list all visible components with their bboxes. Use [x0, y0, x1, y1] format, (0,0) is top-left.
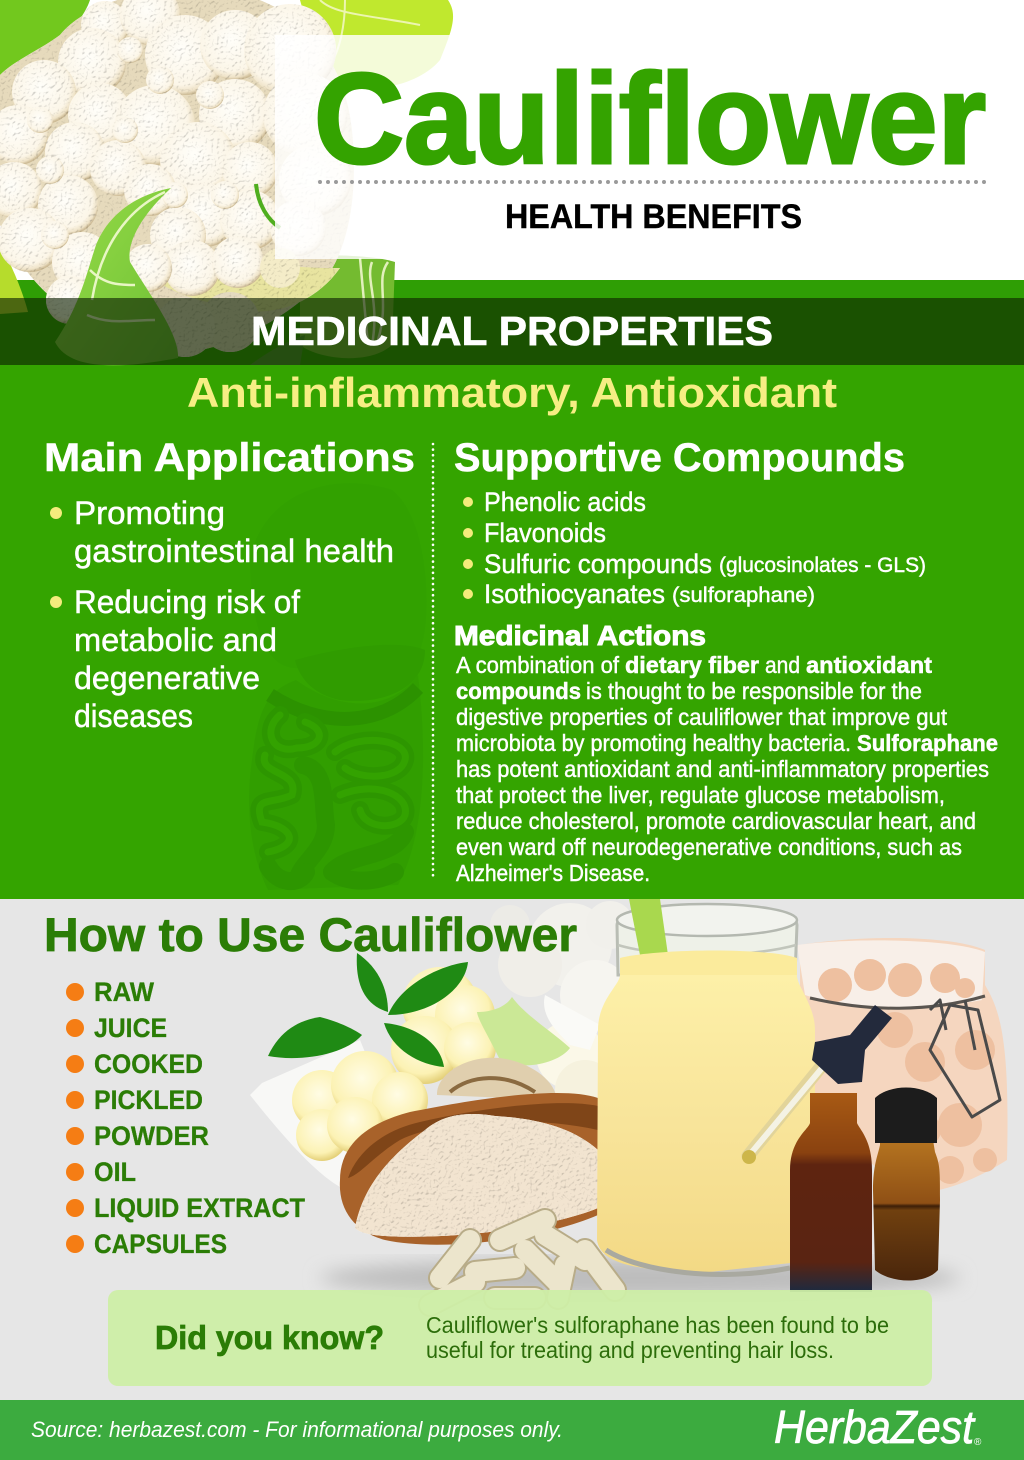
medicinal actions paragraph: compounds — [456, 678, 581, 704]
HerbaZest logo: HerbaZest — [774, 1401, 976, 1453]
medicinal actions paragraph: A combination of — [456, 652, 620, 678]
small stem — [256, 184, 280, 228]
list: forms of use: LIQUID EXTRACT — [94, 1193, 305, 1223]
roasted cauliflower slice — [437, 1058, 557, 1100]
curd florets — [0, 0, 354, 357]
application bullets: gastrointestinal health — [74, 533, 394, 569]
medicinal actions paragraph: microbiota by promoting healthy bacteria. — [456, 730, 851, 756]
small amber bottle — [873, 1088, 940, 1281]
title dotted rule — [320, 180, 986, 184]
list: forms of use: RAW — [94, 977, 154, 1007]
basil leaves — [268, 953, 468, 1067]
medicinal actions paragraph: is thought to be responsible for the — [586, 678, 922, 704]
green top band — [0, 280, 1024, 298]
heading: main applications: Main Applications — [44, 436, 415, 480]
list: forms of use: POWDER — [94, 1121, 209, 1151]
medicinal actions paragraph: antioxidant — [806, 652, 932, 678]
medicinal actions paragraph: Alzheimer's Disease. — [456, 860, 650, 886]
list: forms of use: PICKLED — [94, 1085, 203, 1115]
compound bullets — [463, 487, 926, 609]
translucent white title panel — [275, 35, 450, 259]
medicinal actions paragraph: digestive properties of cauliflower that improve gut — [456, 704, 948, 730]
medicinal actions paragraph: Sulforaphane — [857, 730, 998, 756]
medicinal actions paragraph: dietary fiber — [625, 652, 759, 678]
illustration: cauliflower preparations — [250, 899, 1008, 1305]
medicinal properties panel background — [0, 298, 1024, 899]
left bottom lime leaf — [0, 245, 28, 314]
application bullets: metabolic and — [74, 622, 277, 658]
application bullets: diseases — [74, 698, 193, 734]
heading: medicinal actions: Medicinal Actions — [454, 620, 706, 651]
flour powder — [355, 1114, 598, 1237]
yellow cauliflower florets — [292, 967, 615, 1161]
subheading: properties: Anti-inflammatory, Antioxidant — [187, 369, 837, 416]
top right outer leaf — [300, 0, 453, 88]
medicinal actions paragraph — [456, 652, 998, 886]
faded cauliflower background — [490, 901, 634, 1030]
did you know label: Did you know? — [155, 1319, 384, 1356]
subtitle: health benefits: HEALTH BENEFITS — [505, 198, 802, 236]
did you know text — [426, 1312, 889, 1363]
lower right leaf — [300, 255, 395, 358]
panel: main applications — [44, 436, 415, 734]
illustration: cauliflower head with leaves — [0, 0, 453, 365]
HerbaZest logo: ® — [974, 1437, 982, 1448]
white plate — [250, 1040, 420, 1187]
medicinal actions paragraph: and — [765, 652, 800, 678]
list: forms of use: JUICE — [94, 1013, 167, 1043]
list: forms of use: COOKED — [94, 1049, 203, 1079]
medicinal actions paragraph: that protect the liver, regulate glucose metabolism, — [456, 782, 945, 808]
compound bullets: Isothiocyanates — [484, 579, 665, 609]
front green leaf — [55, 188, 178, 365]
application bullets — [50, 495, 394, 734]
medicinal actions paragraph: has potent antioxidant and anti-inflammatory properties — [456, 756, 989, 782]
list: forms of use — [66, 977, 305, 1259]
dark medicinal properties bar — [0, 298, 1024, 365]
application bullets: Promoting — [74, 495, 225, 531]
capsules — [430, 1220, 615, 1305]
did you know text: Cauliflower's sulforaphane has been found to be — [426, 1312, 889, 1338]
pale green leaf — [477, 997, 570, 1065]
dropper — [742, 1005, 892, 1164]
compound bullets: Sulfuric compounds — [484, 549, 712, 579]
source note: Source: herbazest.com - For informational purposes only. — [31, 1417, 563, 1442]
top left outer leaf — [0, 0, 90, 85]
soft ground shadow — [320, 1258, 960, 1298]
medicinal actions paragraph: even ward off neurodegenerative conditions, such as — [456, 834, 962, 860]
compound bullets: (glucosinolates - GLS) — [719, 554, 926, 577]
wooden bowl — [340, 1093, 598, 1245]
callout: did you know — [108, 1290, 932, 1386]
application bullets: Reducing risk of — [74, 584, 300, 620]
heading: medicinal properties: MEDICINAL PROPERTIES — [251, 308, 773, 354]
did you know text: useful for treating and preventing hair loss. — [426, 1337, 834, 1363]
page background — [0, 0, 1024, 280]
list: forms of use: OIL — [94, 1157, 136, 1187]
compound bullets: (sulforaphane) — [672, 584, 815, 607]
heading: how to use cauliflower: How to Use Cauliflower — [44, 908, 577, 961]
heading: supportive compounds: Supportive Compounds — [454, 436, 905, 480]
compound bullets: Flavonoids — [484, 518, 606, 548]
large amber bottle — [790, 1093, 872, 1292]
list: forms of use: CAPSULES — [94, 1229, 227, 1259]
juice jar — [597, 899, 815, 1274]
green straw — [629, 899, 668, 955]
panel: supportive compounds — [454, 436, 998, 886]
footer bar — [0, 1400, 1024, 1460]
application bullets: degenerative — [74, 660, 260, 696]
how to use panel background — [0, 899, 1024, 1400]
stalk bottom leaves — [250, 335, 305, 365]
glass jar of pickled cauliflower — [797, 938, 1008, 1193]
illustration: digestive organs watermark — [249, 483, 427, 890]
compound bullets: Phenolic acids — [484, 487, 646, 517]
title: Cauliflower: Cauliflower — [314, 48, 986, 191]
medicinal actions paragraph: reduce cholesterol, promote cardiovascular heart, and — [456, 808, 976, 834]
